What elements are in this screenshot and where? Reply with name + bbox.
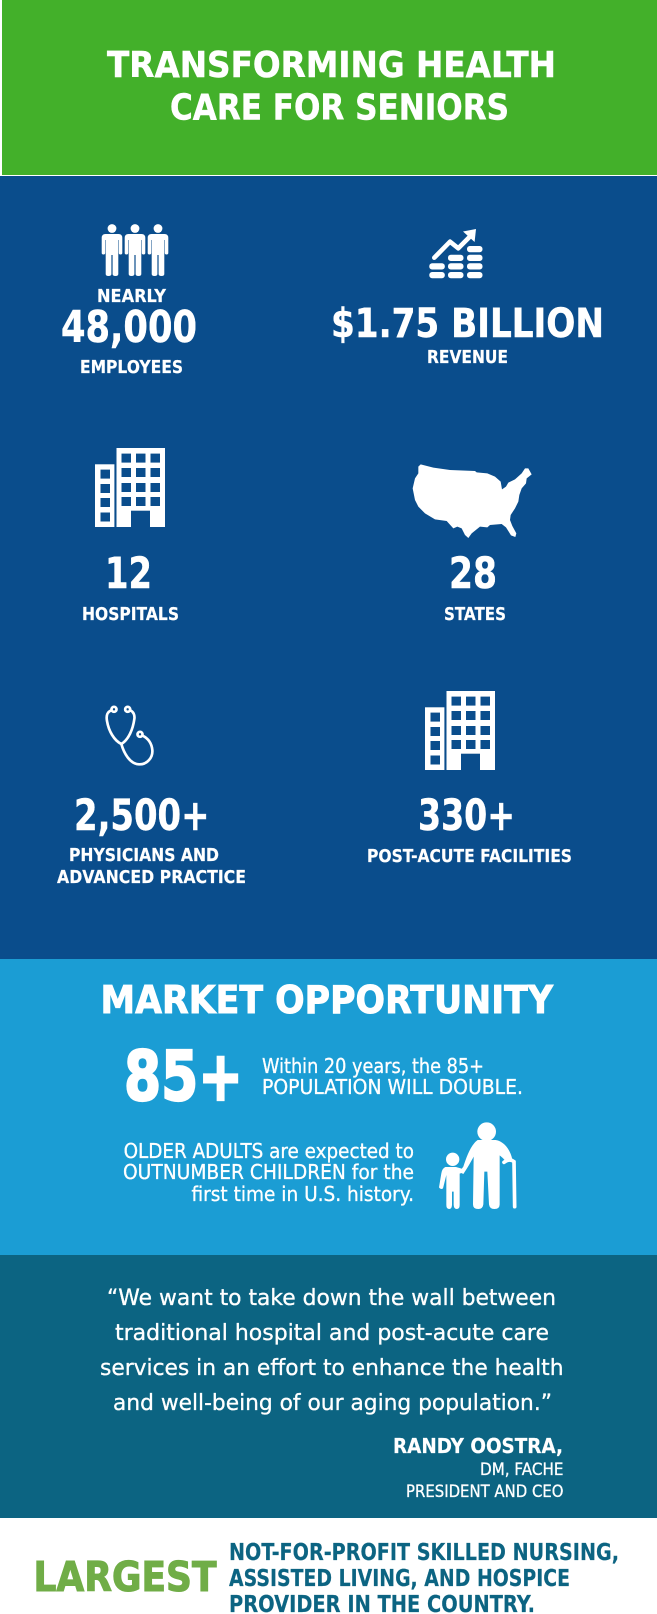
label: nearly: NEARLY [97,286,167,307]
text: older adults outnumber children [123,1139,414,1206]
big number: 85+: 85+ [124,1037,243,1117]
title: TRANSFORMING HEALTH [107,45,556,86]
attribution: DM, FACHE [480,1460,564,1479]
label: employees: EMPLOYEES [80,357,183,378]
icon: map of the United States [413,464,532,538]
label: hospitals: HOSPITALS [82,604,179,625]
attribution [393,1434,564,1501]
text: population will double: POPULATION WILL DOUBLE. [262,1075,523,1099]
icon: rising coins chart [429,229,482,278]
word: largest: LARGEST [34,1553,217,1601]
title [107,45,556,128]
number: 28: 28 [449,549,497,599]
label: states: STATES [444,604,506,625]
panel: key statistics [0,176,657,959]
title: CARE FOR SENIORS [170,88,509,128]
attribution: PRESIDENT AND CEO [406,1482,564,1501]
stat: states [413,464,532,625]
label: physicians and advanced practice: PHYSICIANS AND [69,845,219,866]
quote text: services in an effort to enhance the health [100,1356,564,1381]
text: older adults outnumber children: OUTNUMBER CHILDREN for the [123,1160,414,1184]
number: 12: 12 [105,549,152,599]
label: revenue: REVENUE [427,347,508,368]
stat: hospitals [82,448,179,625]
panel: largest provider [34,1540,619,1614]
panel: title banner [2,0,657,175]
label: post-acute facilities: POST-ACUTE FACILITIES [367,846,572,867]
text: provider description [229,1540,619,1614]
panel: market opportunity [0,959,657,1255]
icon: stethoscope [107,707,152,764]
icon: hospital building [95,448,165,527]
icon: three people [102,224,168,276]
quote text: traditional hospital and post-acute care [115,1321,549,1346]
number: 330+: 330+ [418,791,515,841]
stat: employees [61,224,197,378]
icon: senior with cane and child [439,1122,515,1209]
quote text [100,1286,564,1416]
text: population will double [262,1054,523,1099]
stat: post-acute facilities [367,691,572,867]
stat: physicians [57,707,246,888]
number: 48,000: 48,000 [61,302,197,353]
heading: market opportunity: MARKET OPPORTUNITY [100,978,553,1022]
text: provider description: ASSISTED LIVING, AND HOSPICE [229,1566,570,1592]
quote text: “We want to take down the wall between [107,1286,556,1311]
text: older adults outnumber children: OLDER ADULTS are expected to [124,1139,414,1163]
panel: quote [0,1255,657,1518]
number: revenue: $1.75 BILLION [331,301,604,347]
label: physicians and advanced practice: ADVANCED PRACTICE [57,867,246,888]
attribution: RANDY OOSTRA, [393,1434,563,1458]
stat: revenue [331,229,604,368]
text: older adults outnumber children: first time in U.S. history. [192,1182,414,1206]
icon: facility building [425,691,495,770]
quote text: and well-being of our aging population.” [113,1391,552,1416]
label: physicians and advanced practice [57,845,246,888]
text: population will double: Within 20 years, the 85+ [262,1054,484,1078]
number: 2,500+: 2,500+ [74,791,210,841]
